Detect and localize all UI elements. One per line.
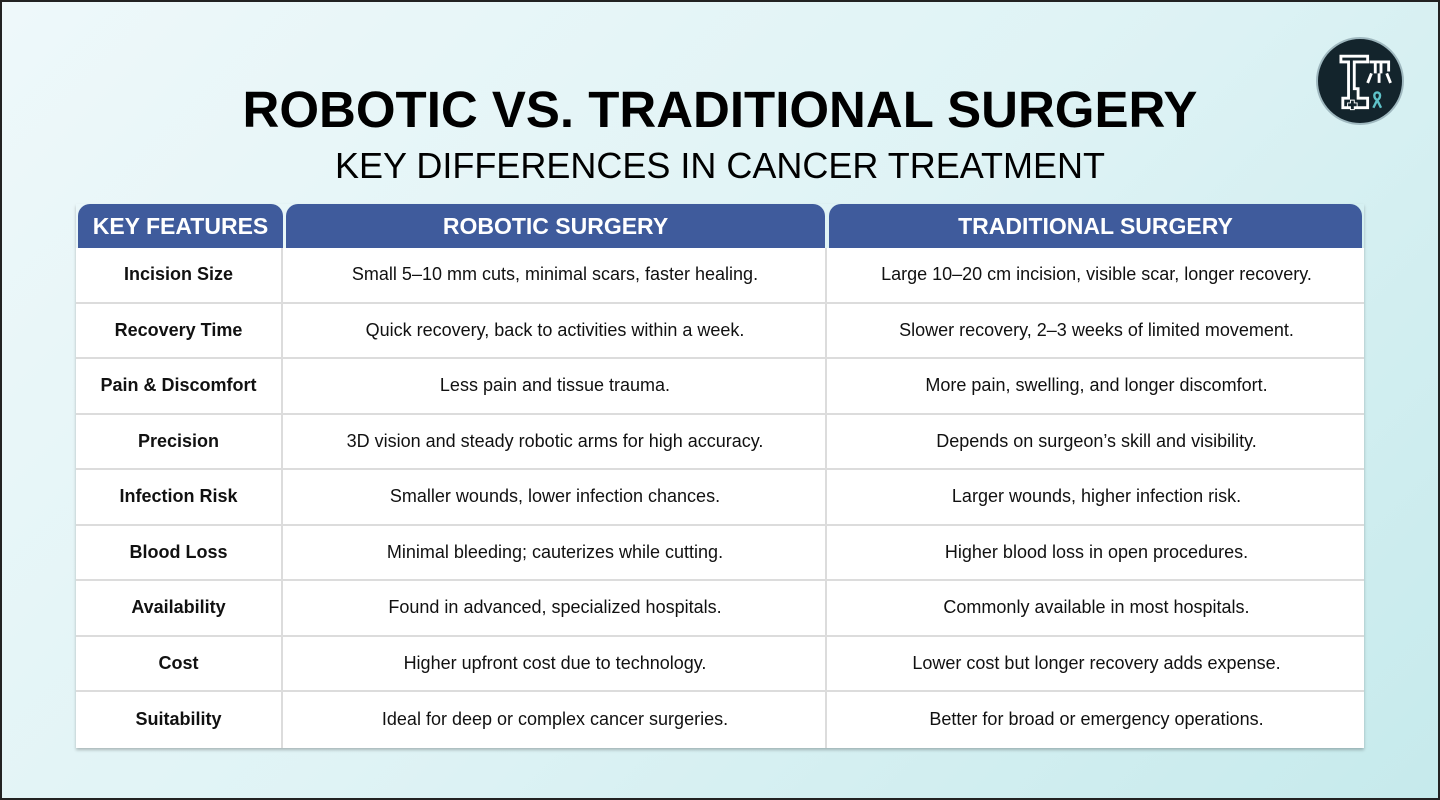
header: robotic surgery: ROBOTIC SURGERY (443, 213, 668, 239)
table rows (76, 248, 1364, 748)
table rows: Ideal for deep or complex cancer surgeries. (382, 709, 728, 729)
header: traditional surgery: TRADITIONAL SURGERY (958, 213, 1233, 239)
table rows: Higher upfront cost due to technology. (404, 653, 706, 673)
table rows: 3D vision and steady robotic arms for high accuracy. (347, 431, 763, 451)
table rows: Availability (131, 597, 226, 617)
table rows: Commonly available in most hospitals. (943, 597, 1250, 617)
table rows: Smaller wounds, lower infection chances. (390, 486, 720, 506)
table rows: Precision (138, 431, 219, 451)
title: ROBOTIC VS. TRADITIONAL SURGERY (243, 81, 1197, 138)
table rows: Found in advanced, specialized hospitals. (388, 597, 722, 617)
table rows: Infection Risk (119, 486, 238, 506)
table rows: Slower recovery, 2–3 weeks of limited movement. (899, 320, 1294, 340)
comparison table (76, 204, 1364, 748)
subtitle: KEY DIFFERENCES IN CANCER TREATMENT (335, 145, 1105, 186)
table rows: Large 10–20 cm incision, visible scar, longer recovery. (881, 264, 1312, 284)
header: key features: KEY FEATURES (93, 213, 268, 239)
table rows: Quick recovery, back to activities within a week. (366, 320, 744, 340)
table rows: Better for broad or emergency operations. (929, 709, 1264, 729)
header: robotic surgery (286, 204, 825, 248)
table rows: Lower cost but longer recovery adds expense. (912, 653, 1281, 673)
table rows: Depends on surgeon’s skill and visibility. (936, 431, 1257, 451)
table rows: Less pain and tissue trauma. (440, 375, 670, 395)
table rows: Recovery Time (115, 320, 242, 340)
table rows: Cost (158, 653, 198, 673)
table rows: Larger wounds, higher infection risk. (952, 486, 1241, 506)
table rows: Small 5–10 mm cuts, minimal scars, faster healing. (352, 264, 758, 284)
icon: robotic surgery logo (1316, 37, 1404, 125)
table rows: Pain & Discomfort (100, 375, 257, 395)
table rows: Higher blood loss in open procedures. (945, 542, 1248, 562)
header: traditional surgery (829, 204, 1362, 248)
table rows: Minimal bleeding; cauterizes while cutting. (387, 542, 723, 562)
header: key features (78, 204, 283, 248)
table rows: Blood Loss (130, 542, 228, 562)
table rows: Incision Size (124, 264, 233, 284)
table rows: More pain, swelling, and longer discomfort. (925, 375, 1268, 395)
table rows: Suitability (135, 709, 222, 729)
